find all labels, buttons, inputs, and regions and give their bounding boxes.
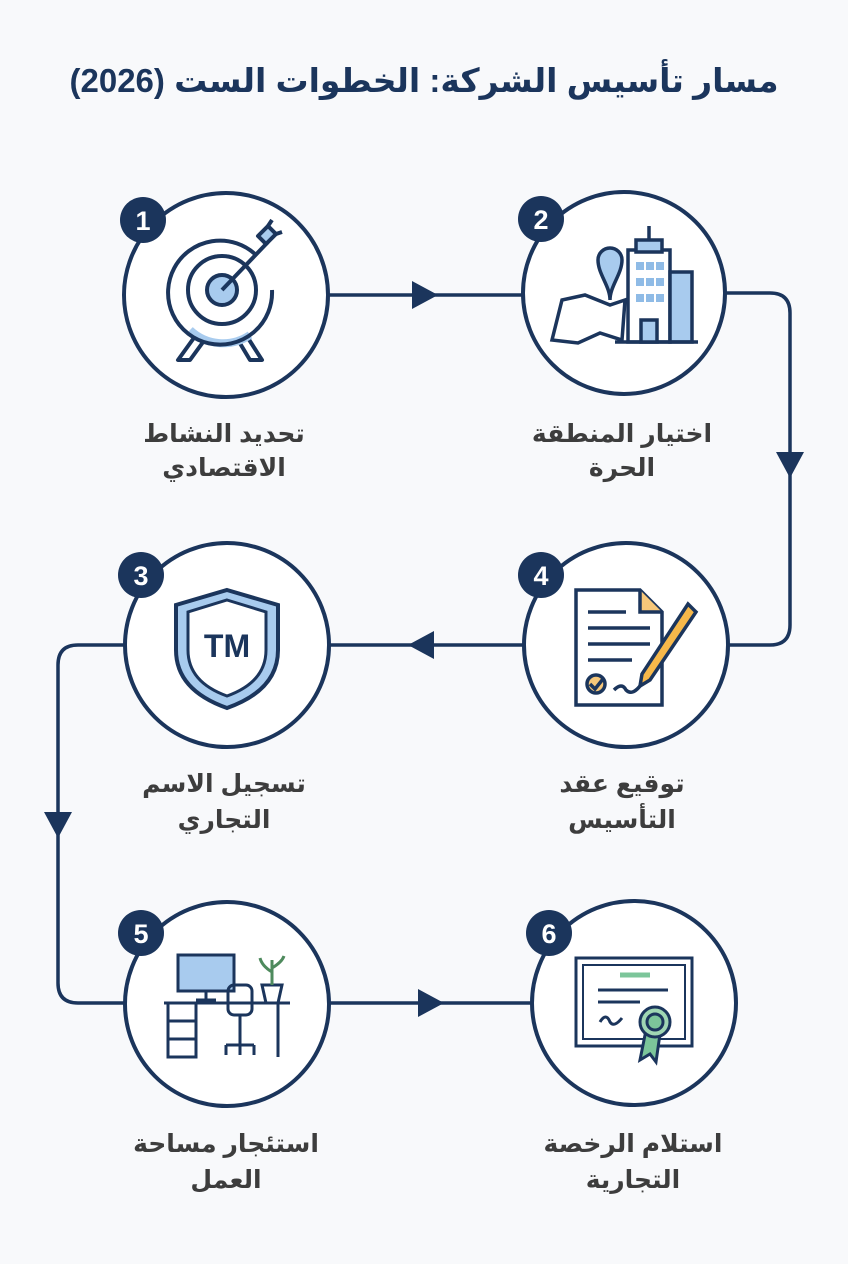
text: التجارية (586, 1166, 680, 1194)
text: العمل (190, 1166, 262, 1194)
icon: shield TM (176, 590, 278, 708)
step 4 (518, 543, 728, 747)
step 1: 1 (135, 206, 151, 236)
icon: map and building (552, 226, 698, 343)
icon: certificate (576, 958, 692, 1062)
step 3: TM (204, 628, 250, 664)
label 6: استلام الرخصة (544, 1130, 722, 1159)
text: التجاري (178, 806, 270, 835)
arrow: right 5 to 6 (418, 989, 444, 1017)
arrow: left 4 to 3 (408, 631, 434, 659)
text: الحرة (589, 454, 655, 483)
step 3: 3 (133, 561, 149, 591)
label 5: استئجار مساحة (133, 1130, 319, 1158)
label 3: تسجيل الاسم (142, 770, 306, 798)
icon: contract with pen (576, 590, 696, 705)
step 4: 4 (533, 561, 549, 591)
badge 2 (518, 196, 564, 242)
title: مسار تأسيس الشركة: الخطوات الست (2026) (69, 59, 779, 101)
badge 6 (526, 910, 572, 956)
step 6: 6 (541, 919, 557, 949)
connector lines (58, 293, 790, 1003)
step 2 (518, 192, 725, 394)
text: الاقتصادي (162, 454, 286, 483)
step 3 (118, 543, 329, 747)
icon: desk (164, 955, 290, 1057)
badge 5 (118, 910, 164, 956)
label 4: توقيع عقد (559, 770, 685, 799)
step 5 (118, 902, 329, 1106)
arrow: down 3 to 5 (44, 812, 72, 838)
badge 3 (118, 552, 164, 598)
text: التأسيس (568, 803, 676, 834)
step 2: 2 (533, 205, 549, 235)
badge 1 (120, 197, 166, 243)
label 1: تحديد النشاط (143, 420, 305, 448)
step 1 (120, 193, 328, 397)
step 5: 5 (133, 919, 149, 949)
icon: target (168, 220, 282, 360)
badge 4 (518, 552, 564, 598)
step 6 (526, 901, 736, 1105)
label 2: اختيار المنطقة (532, 420, 712, 448)
arrow: down 2 to 4 (776, 452, 804, 478)
arrow: right 1 to 2 (412, 281, 438, 309)
